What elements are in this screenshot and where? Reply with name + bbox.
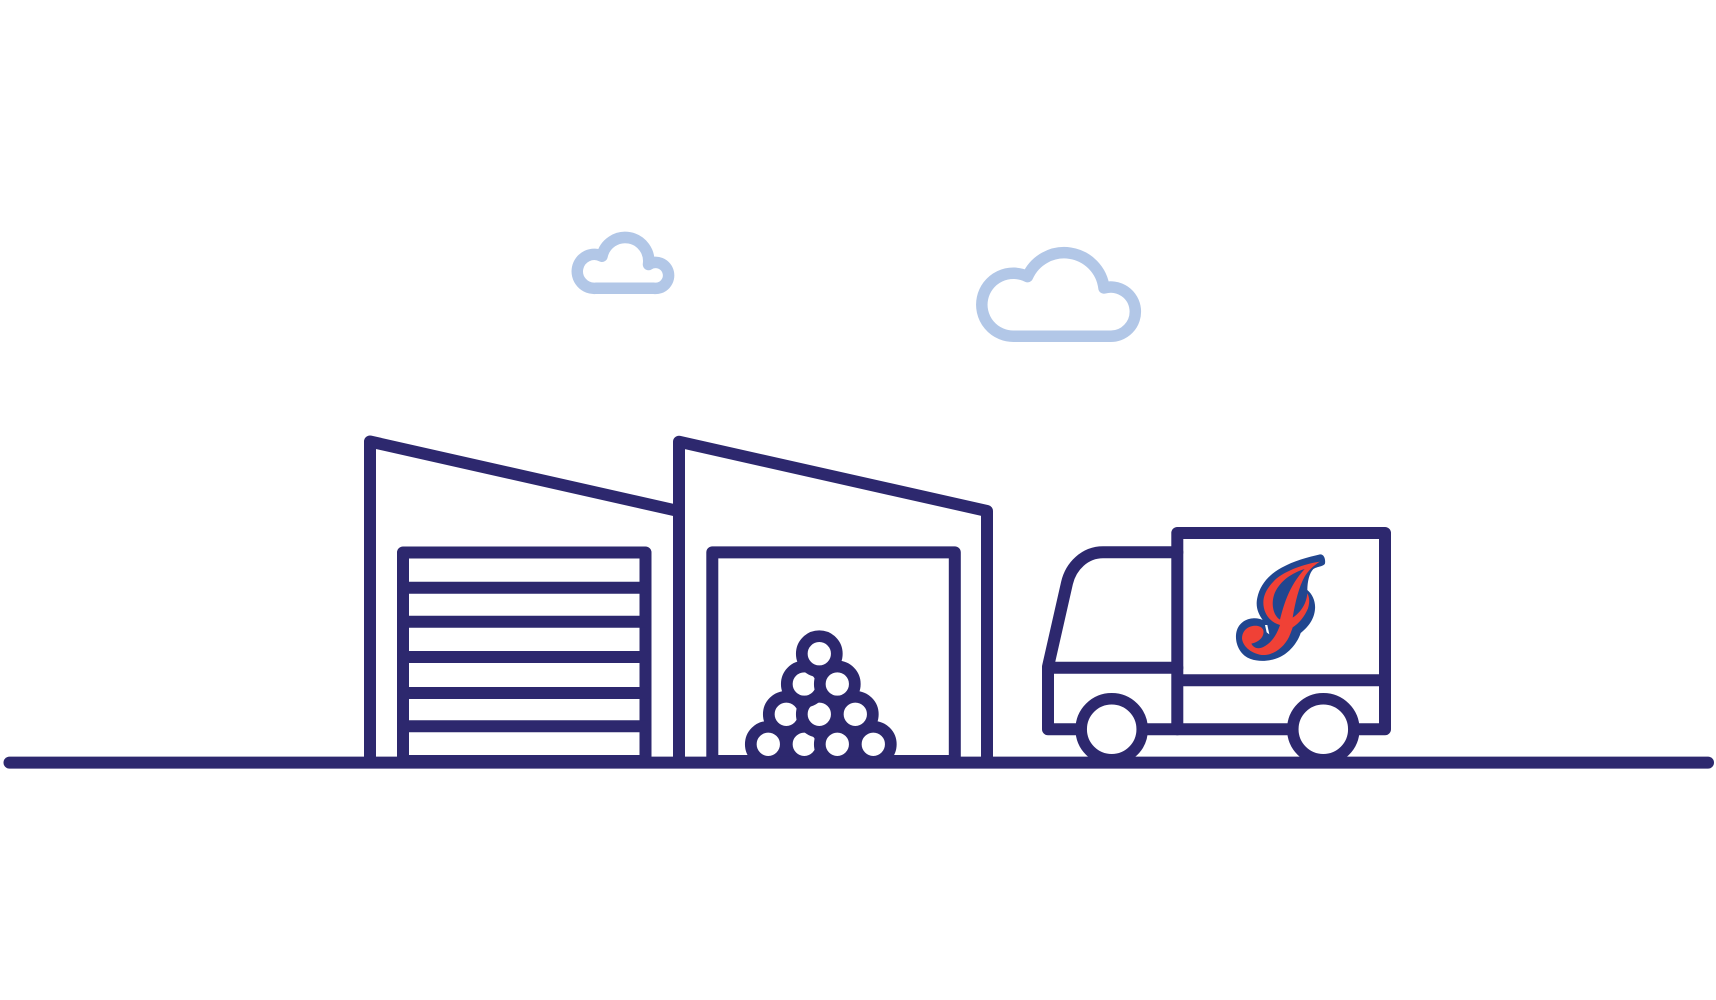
ground line: [10, 757, 1708, 769]
left warehouse building: [370, 442, 679, 762]
delivery truck: [1048, 533, 1385, 760]
left warehouse roller door: [403, 552, 646, 761]
icon: large cloud: [982, 253, 1135, 336]
stacked pipes pile: [751, 636, 891, 762]
truck cab: [1048, 552, 1177, 729]
truck cargo box: [1177, 533, 1385, 729]
rear wheel: [1293, 699, 1354, 760]
right warehouse building: [679, 442, 987, 762]
icon: small cloud: [577, 237, 669, 288]
right warehouse open door: [712, 552, 955, 761]
front wheel: [1081, 699, 1142, 760]
logo: script letter on truck: [1236, 554, 1325, 661]
